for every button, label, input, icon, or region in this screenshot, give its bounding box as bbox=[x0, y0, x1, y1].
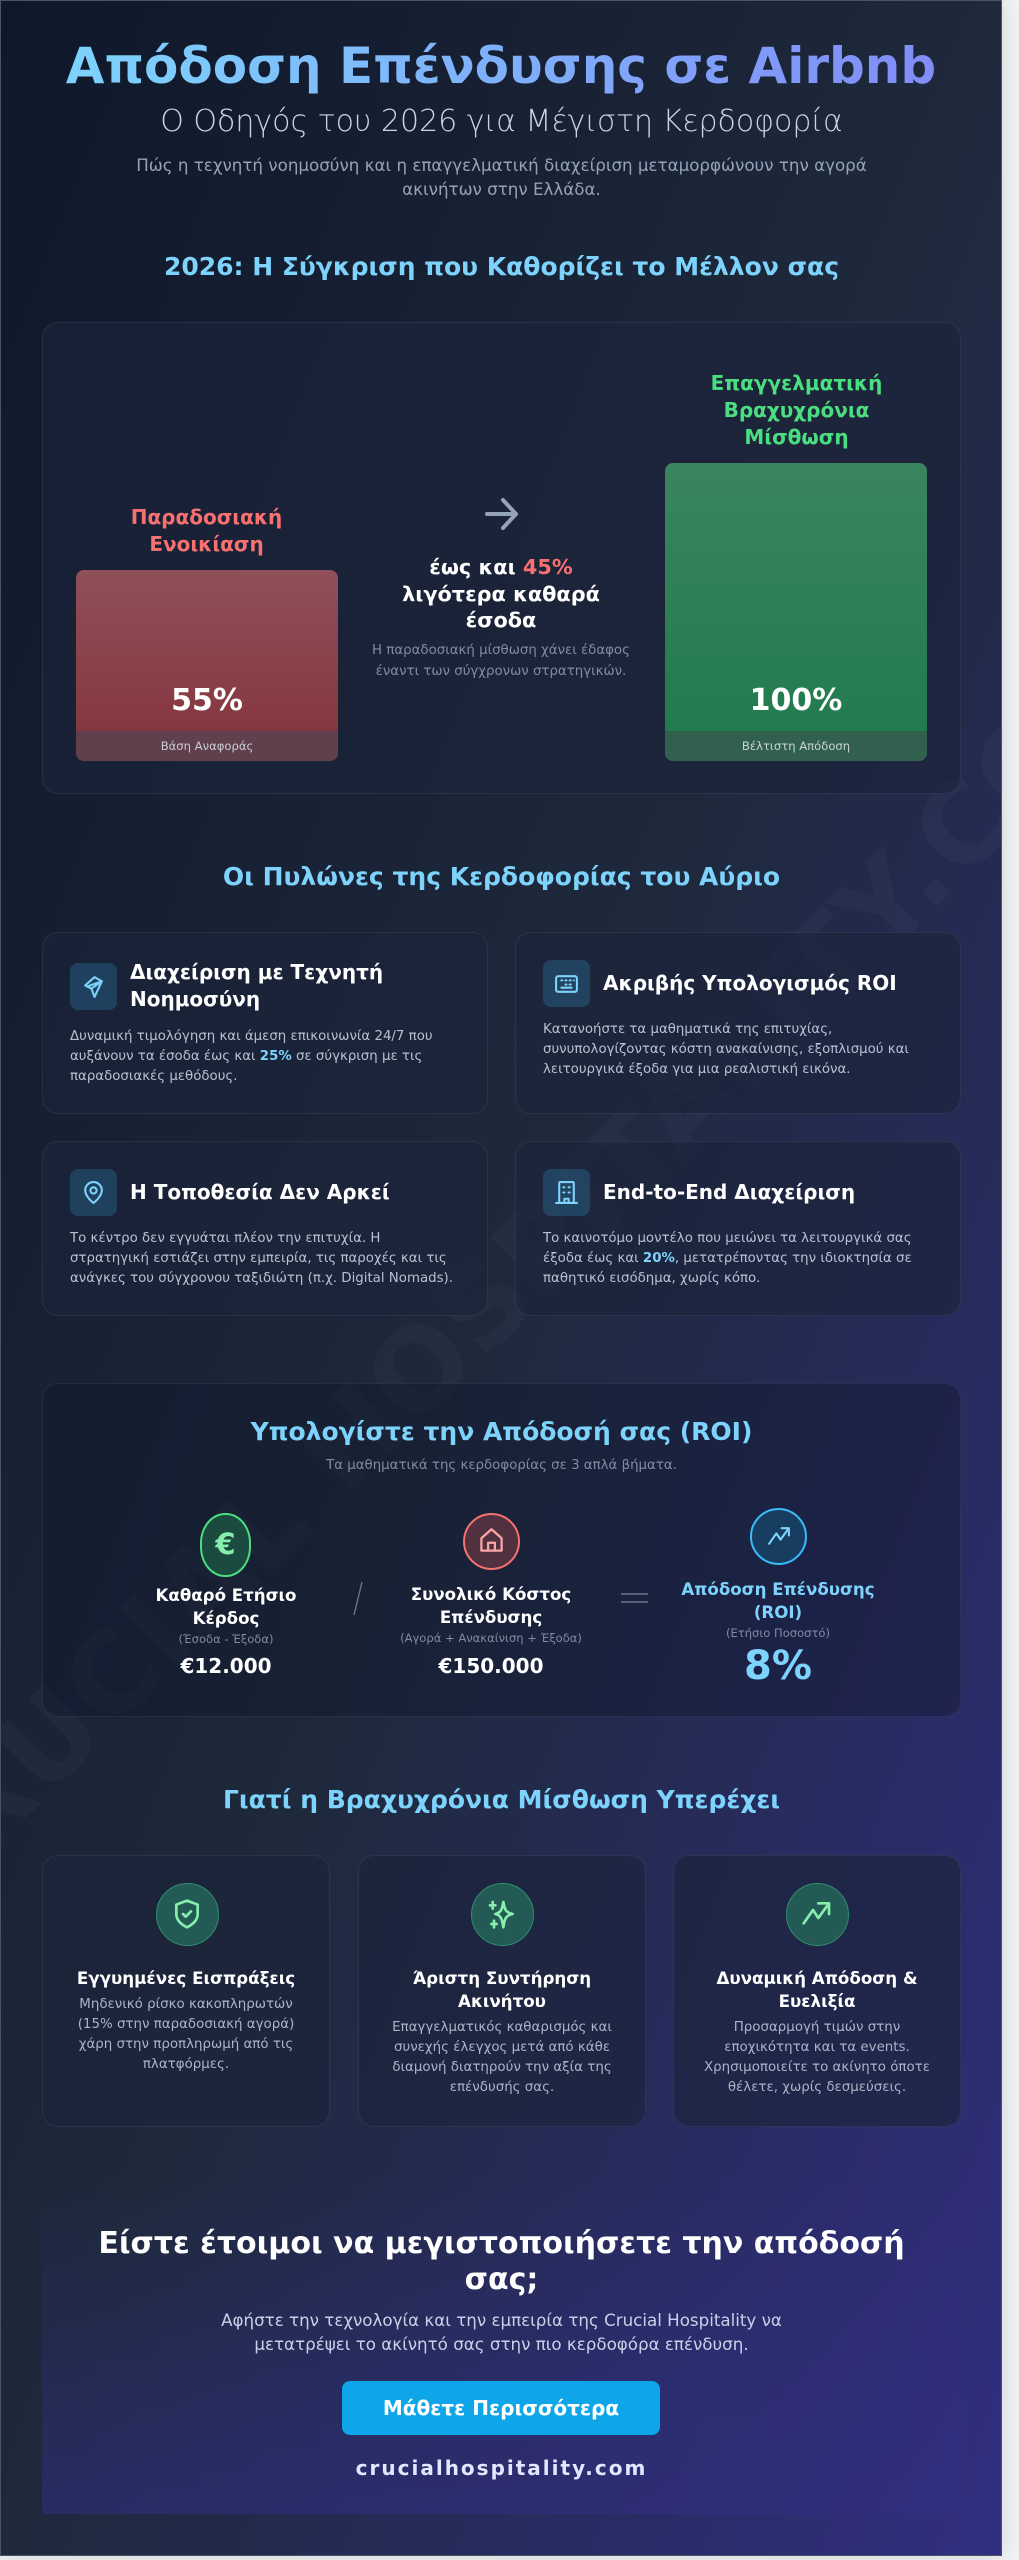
icon: ai wand bbox=[70, 963, 117, 1010]
item title: (ROI) bbox=[754, 1603, 802, 1622]
card title: Νοημοσύνη bbox=[130, 987, 260, 1011]
card title bbox=[130, 960, 383, 1011]
card text: επένδυσής σας. bbox=[450, 2080, 554, 2095]
heading: ROI: Υπολογίστε την Απόδοσή σας (ROI) bbox=[251, 1417, 752, 1446]
label: traditional rental: Παραδοσιακή bbox=[131, 505, 282, 529]
CTA text bbox=[221, 2310, 782, 2354]
card text: Το καινοτόμο μοντέλο που μειώνει τα λειτουργικά σας bbox=[543, 1231, 912, 1246]
card text bbox=[704, 2020, 930, 2095]
intro text: Πώς η τεχνητή νοημοσύνη και η επαγγελματική διαχείριση μεταμορφώνουν την αγορά bbox=[136, 155, 867, 175]
bar caption bbox=[665, 731, 927, 761]
card text: παθητικό εισόδημα, χωρίς κόπο. bbox=[543, 1271, 760, 1286]
callout note: Η παραδοσιακή μίσθωση χάνει έδαφος bbox=[372, 643, 630, 658]
label: professional short-term rental: Επαγγελματική bbox=[711, 371, 882, 395]
card text: αυξάνουν τα έσοδα έως και 25% σε σύγκριση με τις bbox=[70, 1049, 422, 1064]
card text: εποχικότητα και τα events. bbox=[724, 2040, 910, 2055]
card text: έξοδα έως και 20%, μετατρέποντας την ιδιοκτησία σε bbox=[543, 1251, 912, 1266]
card title: Διαχείριση με Τεχνητή bbox=[130, 960, 383, 984]
panel: comparison bbox=[42, 322, 961, 794]
card text: λειτουργικά έξοδα για μια ρεαλιστική εικόνα. bbox=[543, 1062, 851, 1077]
item title: Κέρδος bbox=[193, 1609, 259, 1628]
item title: Συνολικό Κόστος bbox=[411, 1585, 571, 1604]
card text: Το κέντρο δεν εγγυάται πλέον την επιτυχία. Η bbox=[70, 1231, 380, 1246]
CTA button bbox=[342, 2381, 660, 2435]
bar caption: Βάση Αναφοράς bbox=[161, 739, 253, 753]
item value: €12.000 bbox=[180, 1654, 272, 1678]
icon: trend bbox=[750, 1508, 807, 1565]
card title bbox=[716, 1968, 918, 2011]
card text: Δυναμική τιμολόγηση και άμεση επικοινωνία 24/7 που bbox=[70, 1029, 433, 1044]
item title: Καθαρό Ετήσιο bbox=[156, 1586, 296, 1605]
bar: traditional 55% bbox=[76, 570, 338, 761]
callout: 45% less income: έσοδα bbox=[466, 608, 536, 632]
bar caption: Βέλτιστη Απόδοση bbox=[742, 739, 850, 753]
CTA text: μετατρέψει το ακίνητό σας στην πιο κερδοφόρα επένδυση. bbox=[254, 2334, 749, 2354]
formula item: total cost bbox=[400, 1513, 582, 1678]
CTA heading: σας; bbox=[465, 2262, 538, 2297]
card text: θέλετε, χωρίς δεσμεύσεις. bbox=[728, 2080, 906, 2095]
card title: Η Τοποθεσία Δεν Αρκεί bbox=[130, 1180, 390, 1204]
bar value: 55% bbox=[171, 683, 243, 718]
card text: Μηδενικό ρίσκο κακοπληρωτών bbox=[79, 1997, 293, 2012]
ROI subtitle: Τα μαθηματικά της κερδοφορίας σε 3 απλά βήματα. bbox=[326, 1458, 677, 1473]
card text: παραδοσιακές μεθόδους. bbox=[70, 1069, 238, 1084]
card text: ανάγκες του σύγχρονου ταξιδιώτη (π.χ. Digital Nomads). bbox=[70, 1271, 453, 1286]
card title: Ακριβής Υπολογισμός ROI bbox=[603, 971, 897, 995]
card text: διαμονή διατηρούν την αξία της bbox=[392, 2060, 612, 2075]
CTA heading bbox=[98, 2226, 905, 2297]
item note: (Αγορά + Ανακαίνιση + Έξοδα) bbox=[400, 1631, 582, 1645]
card text: πλατφόρμες. bbox=[143, 2057, 229, 2072]
callout note bbox=[372, 643, 630, 678]
icon: map pin bbox=[70, 1169, 117, 1216]
label: traditional rental: Ενοικίαση bbox=[149, 532, 264, 556]
card title: End-to-End Διαχείριση bbox=[603, 1180, 855, 1204]
item value: 8% bbox=[744, 1643, 812, 1689]
icon: shield bbox=[156, 1883, 219, 1946]
card text: στρατηγική εστιάζει στην εμπειρία, τις παροχές και τις bbox=[70, 1251, 447, 1266]
panel: call to action bbox=[42, 2181, 961, 2514]
panel: AI management bbox=[42, 932, 488, 1114]
callout: 45% less income bbox=[402, 555, 600, 632]
panel: ROI calculation bbox=[515, 932, 961, 1114]
bar: professional 100% bbox=[665, 463, 927, 761]
callout note: έναντι των σύγχρονων στρατηγικών. bbox=[376, 664, 626, 678]
operator: equals bbox=[621, 1593, 648, 1603]
card text: Κατανοήστε τα μαθηματικά της επιτυχίας, bbox=[543, 1022, 832, 1037]
card text bbox=[542, 1231, 912, 1286]
icon: calculator bbox=[543, 960, 590, 1007]
card title: Δυναμική Απόδοση & bbox=[716, 1968, 918, 1988]
label: traditional rental bbox=[131, 505, 282, 556]
item title: Απόδοση Επένδυσης bbox=[681, 1580, 875, 1599]
card title: Ευελιξία bbox=[779, 1991, 855, 2011]
panel: location bbox=[42, 1141, 488, 1316]
icon: home bbox=[463, 1513, 520, 1570]
item title bbox=[681, 1580, 875, 1622]
icon: euro bbox=[200, 1513, 251, 1577]
icon: trend up bbox=[786, 1883, 849, 1946]
item title bbox=[156, 1586, 296, 1628]
CTA button: Μάθετε Περισσότερα bbox=[383, 2396, 619, 2420]
label: professional short-term rental: Μίσθωση bbox=[744, 425, 849, 449]
intro text bbox=[136, 155, 867, 199]
card text bbox=[392, 2020, 612, 2095]
card text: συνυπολογίζοντας κόστη ανακαίνισης, εξοπλισμού και bbox=[543, 1042, 909, 1057]
card title: Εγγυημένες Εισπράξεις bbox=[77, 1968, 295, 1988]
item title bbox=[411, 1585, 571, 1627]
panel: dynamic return bbox=[673, 1855, 961, 2127]
formula item: ROI bbox=[681, 1508, 875, 1689]
label: professional short-term rental: Βραχυχρόνια bbox=[724, 398, 869, 422]
operator: divide bbox=[353, 1582, 363, 1615]
item note: (Έσοδα - Έξοδα) bbox=[178, 1632, 274, 1646]
card text: (15% στην παραδοσιακή αγορά) bbox=[78, 2017, 294, 2032]
icon: sparkles bbox=[471, 1883, 534, 1946]
heading: why short-term: Γιατί η Βραχυχρόνια Μίσθωση Υπερέχει bbox=[223, 1785, 780, 1814]
panel: guaranteed receipts bbox=[42, 1855, 330, 2127]
CTA text: Αφήστε την τεχνολογία και την εμπειρία της Crucial Hospitality να bbox=[221, 2310, 782, 2330]
icon: arrow bbox=[485, 498, 518, 530]
title: Απόδοση Επένδυσης σε Airbnb bbox=[66, 37, 936, 95]
callout: 45% less income: έως και 45% bbox=[429, 555, 573, 579]
callout: 45% less income: λιγότερα καθαρά bbox=[402, 582, 600, 606]
card title bbox=[413, 1968, 591, 2011]
bar caption bbox=[76, 731, 338, 761]
card text bbox=[78, 1997, 294, 2072]
heading: pillars: Οι Πυλώνες της Κερδοφορίας του Αύριο bbox=[223, 862, 780, 891]
card title: Άριστη Συντήρηση bbox=[413, 1968, 591, 1988]
card title: Ακινήτου bbox=[458, 1991, 546, 2011]
item title: Επένδυσης bbox=[440, 1608, 542, 1627]
card text: χάρη στην προπληρωμή από τις bbox=[79, 2037, 293, 2052]
panel: end-to-end bbox=[515, 1141, 961, 1316]
CTA heading: Είστε έτοιμοι να μεγιστοποιήσετε την απόδοσή bbox=[98, 2226, 905, 2261]
panel: maintenance bbox=[358, 1855, 646, 2127]
icon: euro: € bbox=[215, 1527, 236, 1561]
formula item: net profit bbox=[156, 1513, 296, 1678]
heading: comparison: 2026: Η Σύγκριση που Καθορίζει το Μέλλον σας bbox=[164, 252, 839, 281]
panel: ROI formula bbox=[42, 1383, 961, 1717]
card text bbox=[70, 1029, 433, 1084]
card text bbox=[70, 1231, 453, 1286]
card text: Επαγγελματικός καθαρισμός και bbox=[392, 2020, 612, 2035]
icon: building bbox=[543, 1169, 590, 1216]
item note: (Ετήσιο Ποσοστό) bbox=[726, 1626, 830, 1640]
website: crucialhospitality.com bbox=[356, 2456, 647, 2480]
intro text: ακινήτων στην Ελλάδα. bbox=[402, 179, 601, 199]
subtitle: Ο Οδηγός του 2026 για Μέγιστη Κερδοφορία bbox=[160, 104, 843, 139]
item value: €150.000 bbox=[438, 1654, 544, 1678]
bar value: 100% bbox=[750, 683, 842, 718]
card text bbox=[543, 1022, 909, 1077]
card text: Χρησιμοποιείτε το ακίνητο όποτε bbox=[704, 2060, 930, 2075]
card text: Προσαρμογή τιμών στην bbox=[734, 2020, 900, 2035]
label: professional short-term rental bbox=[711, 371, 882, 449]
card text: συνεχής έλεγχος μετά από κάθε bbox=[394, 2040, 610, 2055]
